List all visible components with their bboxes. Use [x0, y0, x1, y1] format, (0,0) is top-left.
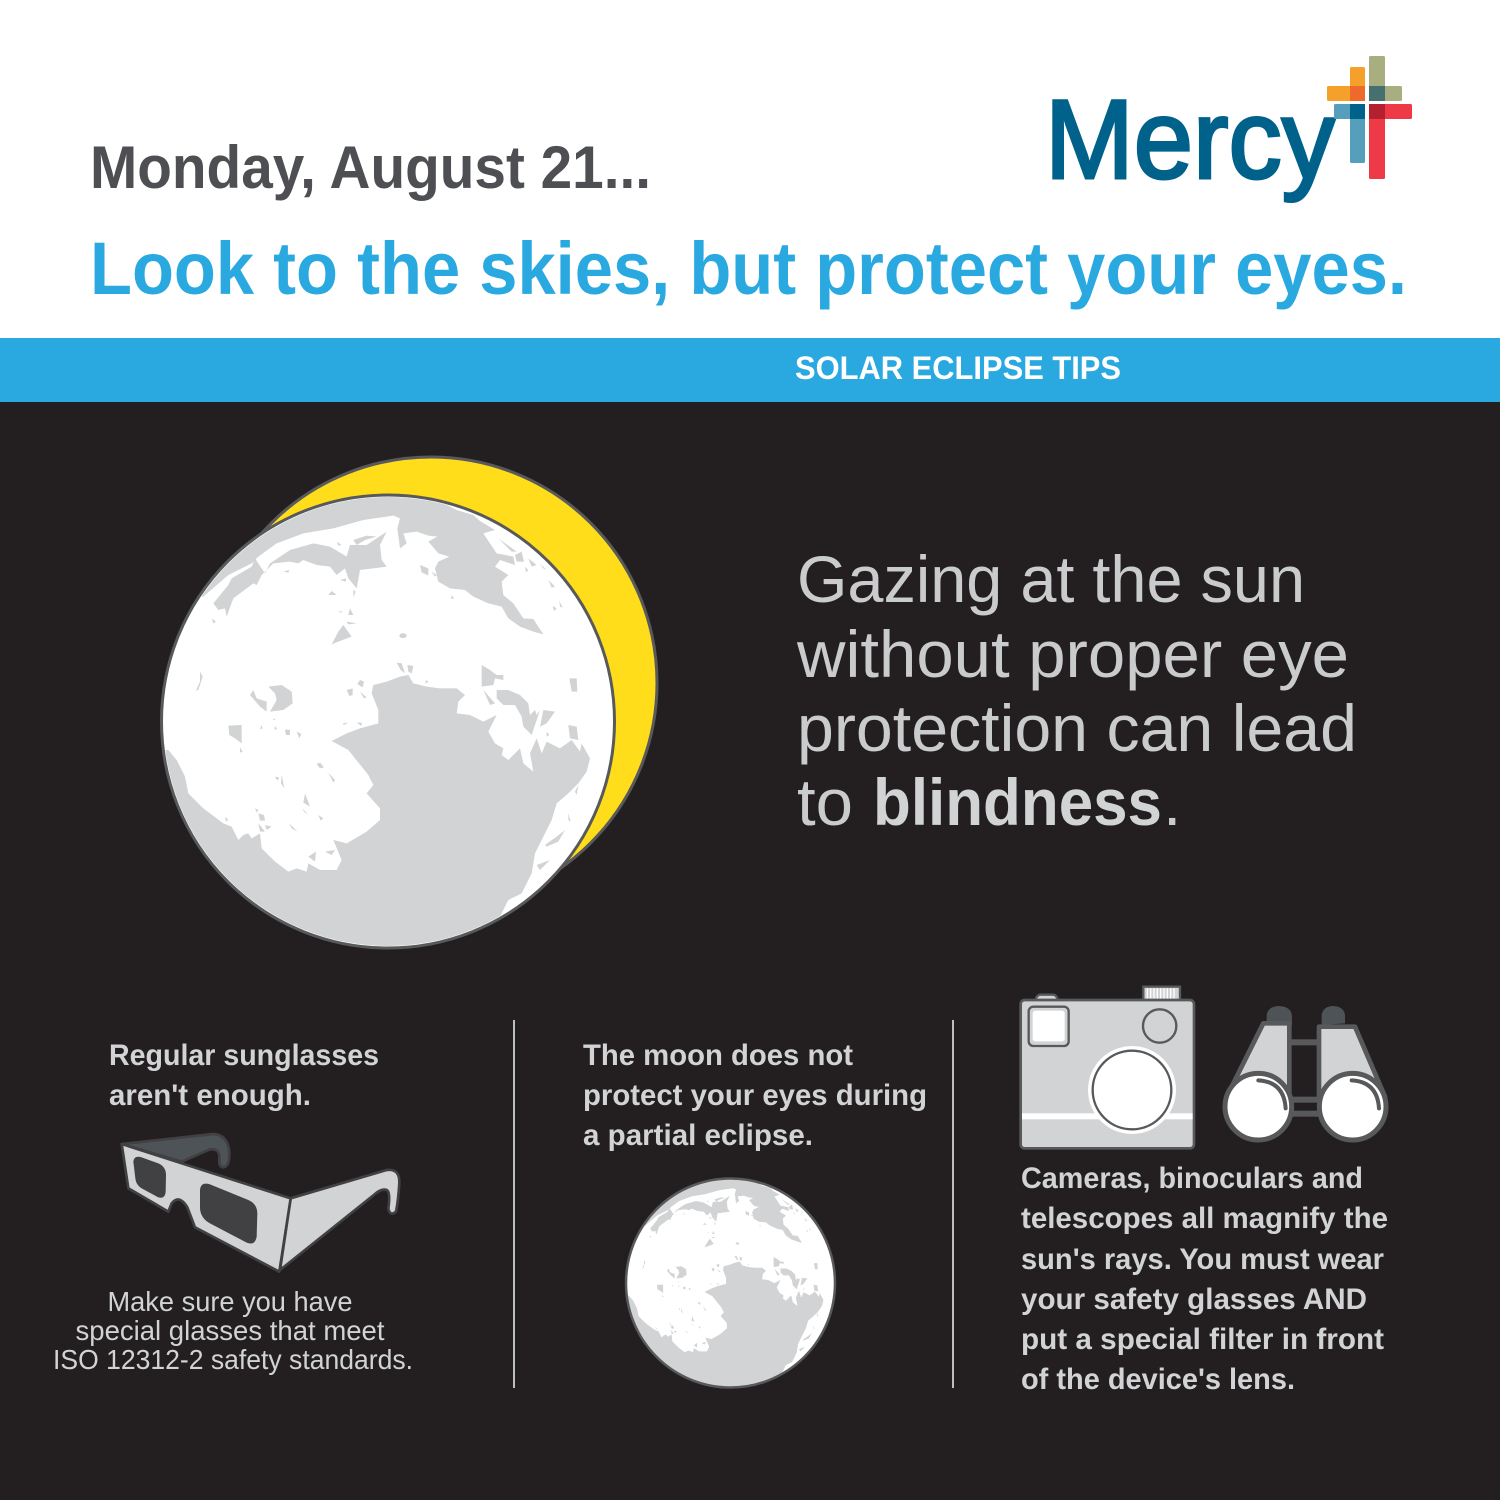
sunglasses heading	[109, 1039, 379, 1112]
blindness warning text: .	[1163, 765, 1181, 839]
sunglasses caption	[53, 1286, 413, 1375]
sunglasses heading: Regular sunglasses	[109, 1039, 379, 1072]
sunglasses caption: special glasses that meet	[76, 1315, 385, 1346]
banner: solar eclipse tips: SOLAR ECLIPSE TIPS	[795, 350, 1121, 386]
partial eclipse text: a partial eclipse.	[583, 1119, 813, 1152]
blindness warning text: without proper eye	[796, 617, 1349, 691]
device warning text: your safety glasses AND	[1021, 1283, 1367, 1316]
moon	[160, 485, 614, 960]
logo: Mercy: Mercy	[1045, 77, 1335, 202]
main heading: Look to the skies, but protect your eyes.	[90, 227, 1407, 310]
blindness warning text: blindness	[873, 765, 1162, 839]
device warning text	[1021, 1162, 1388, 1396]
icon: small moon	[626, 1174, 835, 1393]
blindness warning text: to	[797, 765, 853, 839]
banner: solar eclipse tips	[0, 338, 1500, 402]
dark background	[0, 402, 1500, 1500]
device warning text: telescopes all magnify the	[1021, 1202, 1388, 1235]
divider	[952, 1020, 954, 1388]
sun	[205, 457, 657, 909]
sunglasses caption: Make sure you have	[108, 1286, 352, 1317]
column: partial eclipse	[583, 1039, 927, 1393]
device warning text: of the device's lens.	[1021, 1363, 1295, 1396]
partial eclipse text	[583, 1039, 927, 1152]
icon: eclipse glasses	[122, 1134, 399, 1272]
icon: camera	[1021, 987, 1194, 1148]
column: sunglasses	[53, 1039, 413, 1375]
blindness warning text	[796, 542, 1357, 839]
device warning text: Cameras, binoculars and	[1021, 1162, 1363, 1195]
partial eclipse text: The moon does not	[583, 1039, 853, 1072]
device warning text: sun's rays. You must wear	[1021, 1243, 1384, 1276]
sunglasses heading: aren't enough.	[109, 1079, 311, 1112]
partial eclipse text: protect your eyes during	[583, 1079, 927, 1112]
eclipse illustration	[160, 457, 657, 960]
blindness warning text: Gazing at the sun	[797, 542, 1305, 616]
column: cameras and binoculars	[1021, 987, 1388, 1396]
date heading: Monday, August 21...	[90, 134, 651, 201]
blindness warning text: protection can lead	[797, 691, 1357, 765]
sunglasses caption: ISO 12312-2 safety standards.	[53, 1344, 413, 1375]
divider	[513, 1020, 515, 1388]
device warning text: put a special filter in front	[1021, 1323, 1384, 1356]
icon: binoculars	[1225, 1006, 1386, 1140]
